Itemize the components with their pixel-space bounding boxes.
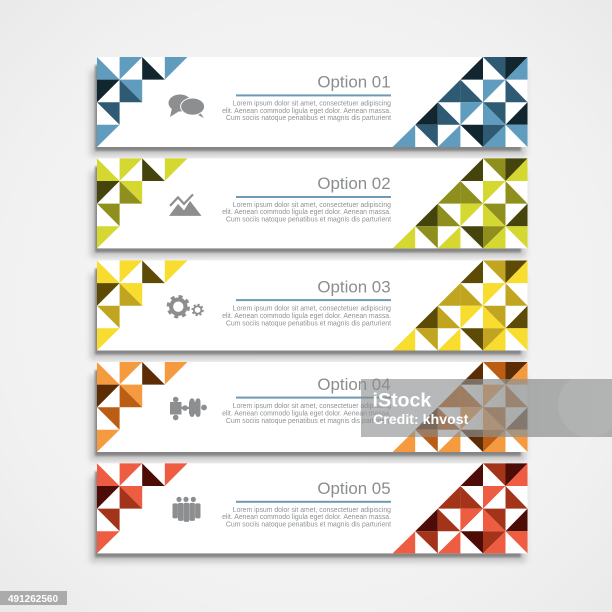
image id label: 491262560: [8, 594, 58, 605]
text block: Lorem ipsum dolor sit amet, consectetuer adipiscing: [233, 306, 391, 312]
text block: elit. Aenean commodo ligula eget dolor. Aenean massa.: [222, 209, 391, 216]
text block: Lorem ipsum dolor sit amet, consectetuer adipiscing: [233, 507, 391, 514]
text block: Cum sociis natoque penatibus et magnis dis parturient: [226, 115, 391, 122]
text block: Lorem ipsum dolor sit amet, consectetuer adipiscing: [233, 202, 391, 209]
divider rule: [236, 397, 391, 399]
text block: Lorem ipsum dolor sit amet, consectetuer adipiscing: [233, 403, 391, 410]
text block: Cum sociis natoque penatibus et magnis dis parturient: [226, 320, 391, 327]
text block: elit. Aenean commodo ligula eget dolor. Aenean massa.: [222, 514, 391, 521]
text block: Cum sociis natoque penatibus et magnis dis parturient: [226, 217, 391, 224]
text block: Cum sociis natoque penatibus et magnis dis parturient: [226, 418, 391, 425]
triangle pattern: [97, 260, 528, 350]
icon: puzzle pieces: [170, 397, 207, 420]
heading: Option 04: [317, 375, 391, 394]
panel: option 04: [90, 362, 528, 461]
triangle pattern: [97, 463, 528, 553]
divider rule: [236, 501, 391, 503]
text block: elit. Aenean commodo ligula eget dolor. Aenean massa.: [222, 313, 391, 320]
image id label: [0, 591, 67, 605]
text block: elit. Aenean commodo ligula eget dolor. Aenean massa.: [222, 410, 391, 417]
divider rule: [236, 94, 391, 96]
divider rule: [236, 299, 391, 301]
heading: Option 02: [317, 174, 391, 193]
heading: Option 05: [317, 479, 391, 498]
text block: Cum sociis natoque penatibus et magnis dis parturient: [226, 522, 391, 529]
text block: elit. Aenean commodo ligula eget dolor. Aenean massa.: [222, 108, 391, 115]
heading: Option 03: [317, 278, 391, 296]
triangle pattern: [97, 362, 528, 452]
icon: chart: [169, 194, 202, 216]
panel: option 02: [90, 158, 528, 257]
triangle pattern: [97, 158, 528, 248]
text block: Lorem ipsum dolor sit amet, consectetuer adipiscing: [233, 100, 391, 107]
icon: gears: [168, 296, 203, 317]
divider rule: [236, 196, 391, 198]
watermark logo: iStock: [372, 390, 431, 412]
triangle pattern: [97, 57, 528, 147]
icon: group of people: [172, 497, 200, 522]
watermark credit: Credit: khvost: [373, 412, 469, 428]
panel: option 01: [90, 57, 528, 156]
watermark band: [361, 373, 612, 437]
panel: option 05: [90, 463, 528, 562]
icon: chat bubbles: [168, 94, 205, 118]
heading: Option 01: [317, 73, 391, 92]
panel: option 03: [90, 260, 528, 360]
